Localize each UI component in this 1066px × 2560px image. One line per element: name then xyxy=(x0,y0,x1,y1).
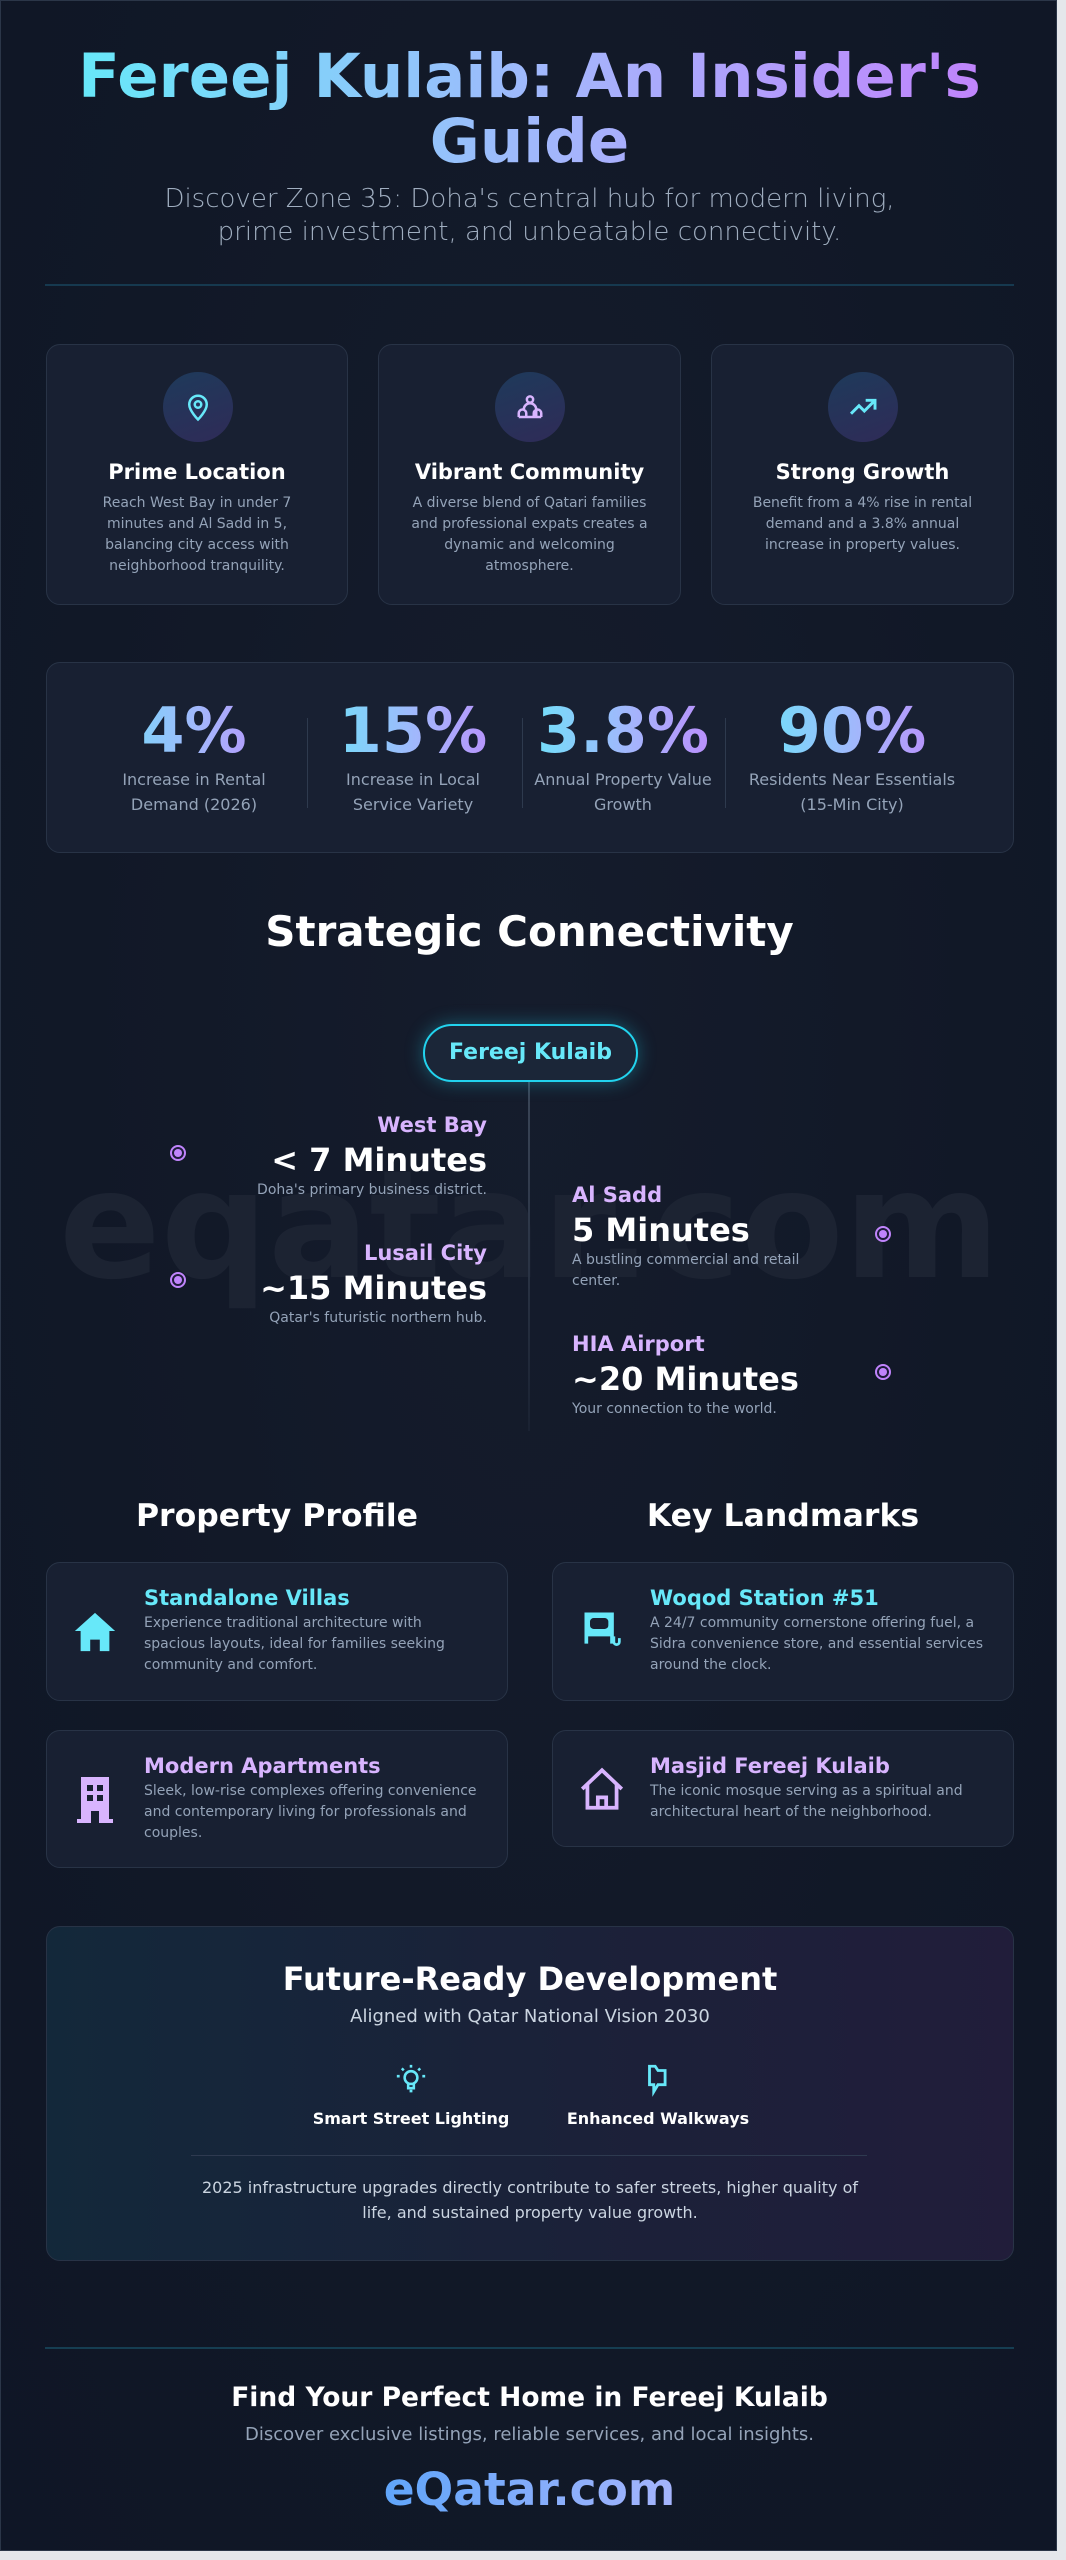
icon: mosque outline xyxy=(581,1768,623,1810)
text: 2025 infrastructure upgrades directly contribute to safer streets, higher quality of life, and sustained property value growth. xyxy=(202,2178,858,2222)
destination: West Bay: < 7 Minutes xyxy=(271,1141,487,1179)
destination: Al Sadd: A bustling commercial and retail center. xyxy=(572,1252,799,1289)
panel: prime location xyxy=(46,344,348,605)
card: woqod station: Woqod Station #51 xyxy=(650,1586,879,1610)
subtitle: Discover Zone 35: Doha's central hub for modern living, xyxy=(164,184,895,214)
heading: property profile: Property Profile xyxy=(136,1498,418,1534)
icon: community xyxy=(495,372,565,442)
title: Fereej Kulaib: An Insider's xyxy=(78,41,981,112)
pill: Fereej Kulaib xyxy=(423,1024,638,1082)
footer brand: eQatar.com xyxy=(384,2463,675,2516)
destination: Lusail: ~15 Minutes xyxy=(260,1269,487,1307)
destination: HIA: HIA Airport xyxy=(572,1332,705,1356)
stat 90%: (15-Min City) xyxy=(800,795,904,814)
icon: trend xyxy=(828,372,898,442)
feature: walkways xyxy=(567,2064,749,2128)
destination: Lusail xyxy=(260,1241,487,1326)
heading: Strong Growth xyxy=(776,460,949,484)
card: masjid: Masjid Fereej Kulaib xyxy=(650,1754,890,1778)
heading: key landmarks: Key Landmarks xyxy=(647,1498,919,1534)
stat 15%: Increase in Local xyxy=(346,770,480,789)
destination: West Bay: Doha's primary business district. xyxy=(257,1182,487,1198)
destination: Al Sadd xyxy=(572,1183,799,1289)
card: woqod station xyxy=(552,1562,1014,1701)
pill: Fereej Kulaib: Fereej Kulaib xyxy=(449,1040,612,1065)
subheading: Aligned with Qatar National Vision 2030 xyxy=(350,2006,710,2027)
heading: Prime Location xyxy=(108,460,286,484)
icon: building xyxy=(77,1777,113,1823)
card: masjid xyxy=(552,1730,1014,1847)
icon: house xyxy=(75,1613,115,1652)
icon: location pin xyxy=(163,372,233,442)
stat 15% xyxy=(339,694,487,814)
timeline line xyxy=(528,1081,530,1431)
destination: HIA xyxy=(572,1332,799,1417)
destination: West Bay xyxy=(257,1113,487,1198)
stat 4%: 4% xyxy=(141,694,247,767)
stat 4%: Increase in Rental xyxy=(122,770,266,789)
destination: West Bay: West Bay xyxy=(377,1113,487,1137)
stat 3.8%: Growth xyxy=(594,795,652,814)
stat 4%: Demand (2026) xyxy=(131,795,257,814)
card: standalone villas: Experience traditional architecture with spacious layouts, ideal for families seeking community and comfort. xyxy=(144,1615,445,1673)
panel: stats xyxy=(46,662,1014,853)
heading: Vibrant Community xyxy=(415,460,644,484)
card: woqod station: A 24/7 community cornerstone offering fuel, a Sidra convenience store, and essential services around the clock. xyxy=(650,1615,983,1673)
card: standalone villas: Standalone Villas xyxy=(144,1586,350,1610)
panel: vibrant community xyxy=(378,344,681,605)
destination: HIA: Your connection to the world. xyxy=(572,1401,777,1417)
footer heading: Find Your Perfect Home in Fereej Kulaib xyxy=(231,2382,828,2413)
subtitle: prime investment, and unbeatable connectivity. xyxy=(218,217,841,247)
stat 3.8%: 3.8% xyxy=(537,694,709,767)
footer text: Discover exclusive listings, reliable services, and local insights. xyxy=(245,2424,814,2445)
subtitle xyxy=(164,184,895,247)
feature: smart lighting: Smart Street Lighting xyxy=(313,2109,509,2128)
card: modern apartments: Modern Apartments xyxy=(144,1754,381,1778)
destination: Lusail: Lusail City xyxy=(364,1241,487,1265)
stat 15%: 15% xyxy=(339,694,487,767)
stat 90%: 90% xyxy=(778,694,926,767)
stat 90% xyxy=(749,694,955,814)
card: masjid: The iconic mosque serving as a spiritual and architectural heart of the neighborhood. xyxy=(650,1783,963,1820)
panel: strong growth xyxy=(711,344,1014,605)
text: A diverse blend of Qatari families and professional expats creates a dynamic and welcoming atmosphere. xyxy=(411,495,648,574)
card: standalone villas xyxy=(46,1562,508,1701)
destination: Al Sadd: 5 Minutes xyxy=(572,1211,750,1249)
stat 15%: Service Variety xyxy=(353,795,473,814)
destination: HIA: ~20 Minutes xyxy=(572,1360,799,1398)
destination: Al Sadd: Al Sadd xyxy=(572,1183,662,1207)
text: Reach West Bay in under 7 minutes and Al Sadd in 5, balancing city access with neighborhood tranquility. xyxy=(103,495,291,574)
stat 90%: Residents Near Essentials xyxy=(749,770,955,789)
panel: future-ready development xyxy=(46,1926,1014,2261)
stat 3.8%: Annual Property Value xyxy=(534,770,712,789)
icon: fuel station xyxy=(584,1612,621,1646)
card: modern apartments: Sleek, low-rise complexes offering convenience and contemporary living for professionals and couples. xyxy=(144,1783,476,1841)
watermark: eqatar.com xyxy=(59,1139,1000,1313)
title: Guide xyxy=(430,106,629,177)
stat 4% xyxy=(122,694,266,814)
heading: Future-Ready Development xyxy=(283,1960,777,1998)
stat 3.8% xyxy=(534,694,712,814)
destination: Lusail: Qatar's futuristic northern hub. xyxy=(269,1310,487,1326)
feature: smart lighting xyxy=(313,2064,509,2128)
heading: strategic connectivity: Strategic Connectivity xyxy=(265,907,794,956)
title xyxy=(78,41,981,177)
text: Benefit from a 4% rise in rental demand and a 3.8% annual increase in property values. xyxy=(753,495,972,553)
feature: walkways: Enhanced Walkways xyxy=(567,2109,749,2128)
card: modern apartments xyxy=(46,1730,508,1868)
